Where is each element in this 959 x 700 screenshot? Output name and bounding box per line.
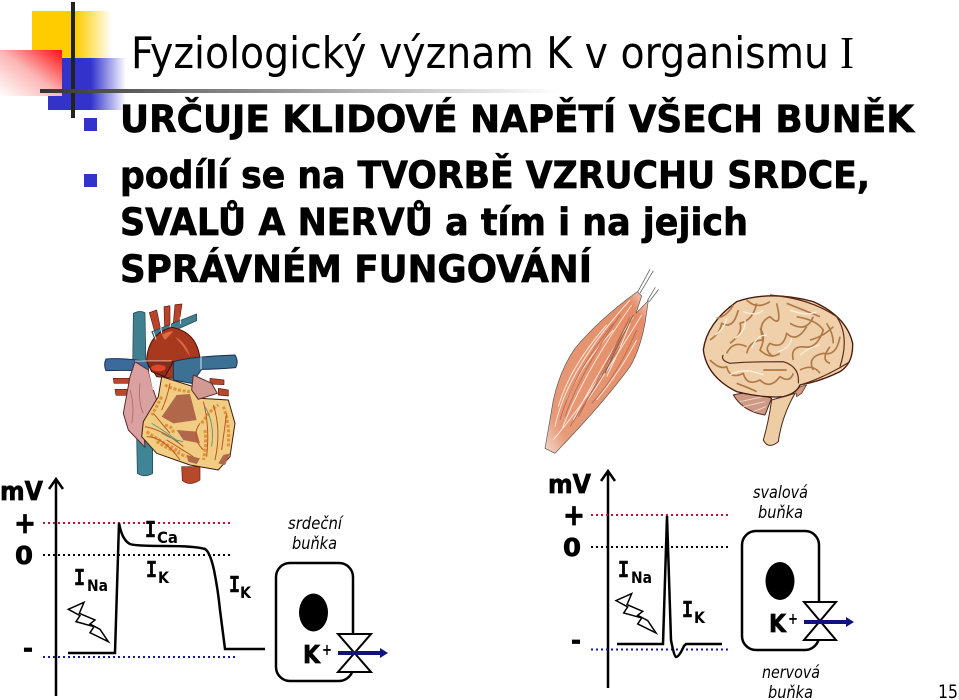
current labels: Na: [87, 576, 108, 595]
current labels: K: [158, 568, 170, 587]
axis labels: [0, 477, 43, 663]
axis labels: +: [563, 498, 585, 532]
logo: overlapping squares and lines: [0, 2, 560, 118]
icon: muscle: [545, 269, 659, 453]
threshold lines: [43, 523, 235, 657]
current labels: I: [618, 558, 629, 585]
current labels: I: [74, 566, 85, 593]
bullet list: [84, 97, 915, 291]
voltage axis: [601, 471, 615, 688]
chart: cardiac action potential: [0, 477, 265, 696]
axis labels: -: [23, 634, 33, 663]
cell: muscle and nerve: svalová: [753, 483, 808, 503]
axis labels: mV: [0, 477, 43, 507]
cell: muscle and nerve: nervová: [762, 663, 820, 683]
bullet list: URČUJE KLIDOVÉ NAPĚTÍ VŠECH BUNĚK: [120, 97, 915, 141]
icon: brain: [703, 295, 853, 445]
axis labels: -: [571, 626, 581, 655]
title: I: [840, 27, 854, 78]
cell: cardiac: K: [303, 640, 321, 669]
cell: muscle and nerve: K: [769, 609, 787, 638]
axis labels: +: [14, 506, 36, 540]
threshold lines: [591, 515, 728, 650]
current labels: K: [694, 608, 706, 627]
axis labels: 0: [15, 541, 33, 570]
icon: lightning: [616, 594, 656, 633]
current labels: K: [240, 583, 252, 602]
icon: heart: [105, 304, 237, 483]
current labels: I: [682, 598, 693, 625]
bullet list: podílí se na TVORBĚ VZRUCHU SRDCE,: [120, 153, 870, 197]
cell: cardiac: buňka: [292, 534, 337, 554]
cell: cardiac: srdeční: [288, 514, 344, 534]
chart: skeletal and nerve action potential: [548, 470, 728, 688]
cell: cardiac: [276, 514, 388, 681]
trace: [617, 516, 722, 657]
current labels: I: [229, 573, 240, 600]
cell: cardiac: +: [322, 640, 332, 659]
cell: muscle and nerve: +: [788, 609, 798, 628]
icon: lightning: [68, 602, 108, 642]
current labels: [74, 518, 252, 602]
current labels: Na: [631, 568, 652, 587]
voltage axis: [49, 479, 63, 696]
current labels: I: [145, 518, 156, 545]
bullet list: SVALŮ A NERVŮ a tím i na jejich: [120, 200, 748, 244]
current labels: Ca: [157, 528, 178, 547]
axis labels: [548, 470, 591, 655]
title: Fyziologický význam K v organismu: [131, 28, 829, 79]
cell: muscle and nerve: buňka: [758, 503, 803, 523]
axis labels: mV: [548, 470, 591, 500]
axis labels: 0: [563, 533, 581, 562]
current labels: [618, 558, 706, 627]
current labels: I: [146, 558, 157, 585]
bullet list: SPRÁVNÉM FUNGOVÁNÍ: [120, 247, 592, 291]
trace: [68, 523, 265, 653]
cell: muscle and nerve: [742, 483, 854, 700]
